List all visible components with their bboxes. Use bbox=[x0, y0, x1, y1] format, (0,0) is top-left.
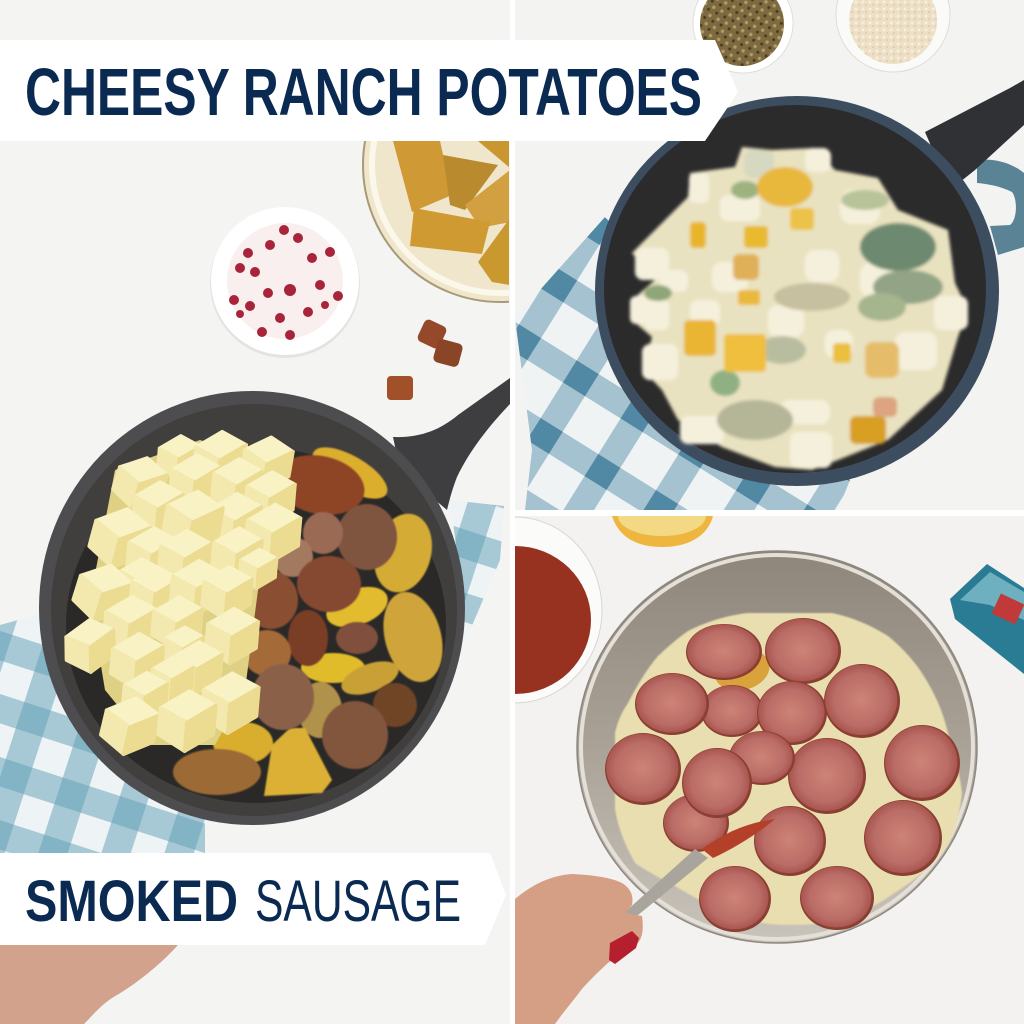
food: cheesy potato mash bbox=[630, 147, 968, 470]
food: browned sausage chunks bbox=[173, 447, 417, 795]
icon: blue seasoning box bbox=[950, 564, 1024, 674]
food: white potato cubes bbox=[62, 432, 301, 758]
food: yellow potato pieces bbox=[213, 437, 452, 796]
subtitle bbox=[25, 869, 461, 934]
icon: blue checked towel bbox=[515, 217, 850, 510]
icon: blue handle loop bbox=[977, 160, 1024, 255]
icon: knife with sauce bbox=[625, 819, 775, 916]
panel: top right photo, cheesy potatoes in skillet bbox=[515, 0, 1024, 510]
icon: yellow bowl bbox=[612, 516, 713, 547]
title: CHEESY RANCH POTATOES bbox=[25, 55, 702, 130]
title banner bbox=[0, 40, 738, 141]
icon: plate of fried pieces bbox=[362, 141, 509, 303]
icon: bowl of seasoning bbox=[693, 0, 793, 73]
subtitle: SAUSAGE bbox=[255, 869, 461, 934]
panel: left photo, potatoes and sausage in skillet bbox=[0, 0, 510, 1024]
icon: bowl of salt and red peppercorns bbox=[210, 207, 360, 358]
icon: loose sausage chunks bbox=[387, 318, 464, 400]
icon: bowl of red spice bbox=[515, 516, 602, 704]
food: creamy sauce bbox=[615, 613, 962, 925]
icon: hand with red nail bbox=[515, 874, 643, 1024]
subtitle banner bbox=[0, 853, 506, 945]
icon: steel pan bbox=[577, 551, 977, 943]
panel: bottom right photo, sausage slices in steel pan bbox=[515, 516, 1024, 1024]
subtitle: SMOKED bbox=[25, 869, 238, 934]
icon: skillet with handle bbox=[39, 378, 510, 825]
icon: bowl of grated cheese bbox=[836, 0, 950, 72]
icon: blue checked towel bbox=[0, 500, 504, 853]
icon: hand at bottom bbox=[0, 945, 178, 1024]
food: sausage slices bbox=[605, 618, 960, 932]
icon: dark skillet bbox=[595, 80, 1024, 486]
